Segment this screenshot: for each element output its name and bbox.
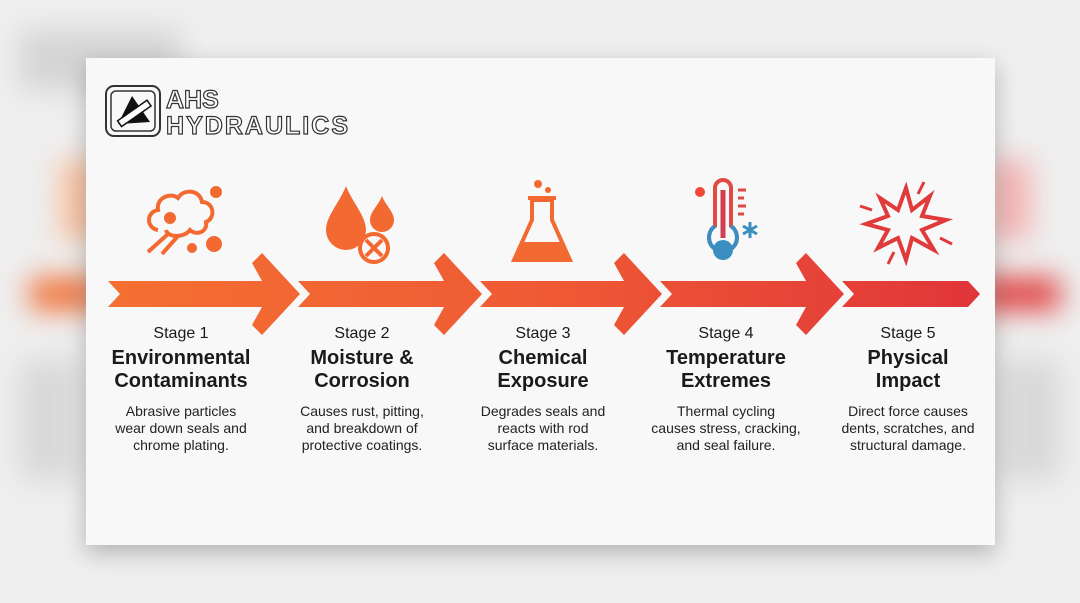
stage 2 text: Corrosion	[314, 370, 410, 392]
stage 3 text: reacts with rod	[497, 420, 589, 436]
icon: dust cloud	[146, 186, 222, 256]
stage 1 text: chrome plating.	[133, 437, 229, 453]
stage 2 text: protective coatings.	[302, 437, 422, 453]
stage 4 text: causes stress, cracking,	[651, 420, 801, 436]
stage 5 text: Stage 5	[880, 325, 936, 342]
stage 1 text: Environmental	[112, 347, 250, 369]
logo	[105, 85, 348, 140]
stage 5 text: Physical	[867, 347, 949, 369]
icon: water drops	[326, 186, 394, 264]
stage 5 text: structural damage.	[850, 437, 966, 453]
stage 1 text: Contaminants	[114, 370, 248, 392]
icon: impact burst	[860, 181, 953, 266]
stage 1 text: wear down seals and	[115, 420, 247, 436]
stage 3 text: Stage 3	[515, 325, 571, 342]
arrows	[108, 253, 980, 335]
stage 1 text	[112, 325, 250, 453]
stage 3 text: Exposure	[497, 370, 589, 392]
stage 5 text: dents, scratches, and	[841, 420, 975, 436]
icon: thermometer	[695, 178, 758, 260]
stage 3 text: Degrades seals and	[481, 403, 605, 419]
stage 1 text: Stage 1	[153, 325, 209, 342]
icon: flask	[511, 180, 573, 262]
stage 3 text: surface materials.	[488, 437, 598, 453]
main card	[86, 58, 995, 545]
stage 2 text: Stage 2	[334, 325, 390, 342]
stage 4 text: Thermal cycling	[677, 403, 775, 419]
stage 4 text: Temperature	[666, 347, 786, 369]
stage 4 text	[651, 325, 801, 453]
stage 3 text: Chemical	[499, 347, 587, 369]
stage 2 text	[300, 325, 424, 453]
stage 4 text: Extremes	[681, 370, 771, 392]
stage 1 text: Abrasive particles	[126, 403, 236, 419]
logo: HYDRAULICS	[166, 112, 348, 140]
stage 5 text: Impact	[876, 370, 940, 392]
stage 2 text: Causes rust, pitting,	[300, 403, 424, 419]
stage 5 text	[841, 325, 975, 453]
stage 2 text: Moisture &	[310, 347, 414, 369]
stage 3 text	[481, 325, 605, 453]
stage 2 text: and breakdown of	[306, 420, 418, 436]
logo: AHS	[166, 86, 219, 114]
stage 4 text: and seal failure.	[677, 437, 775, 453]
stage 4 text: Stage 4	[698, 325, 754, 342]
stage 5 text: Direct force causes	[848, 403, 968, 419]
